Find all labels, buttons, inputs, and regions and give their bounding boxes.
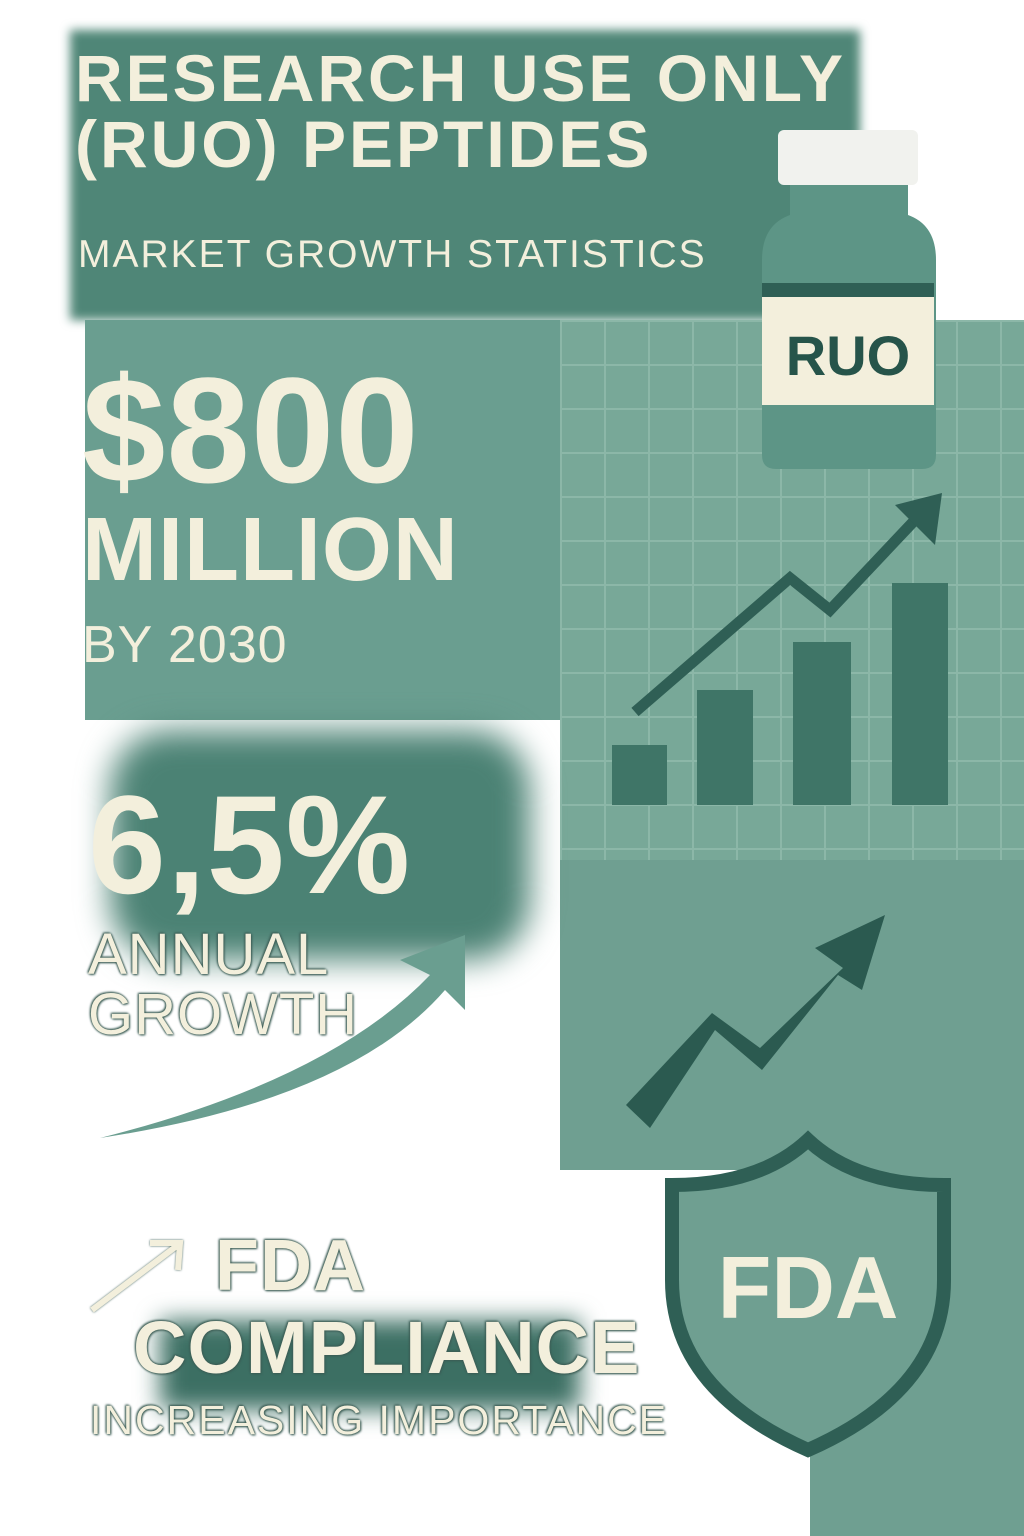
stat: 800 million: MILLION [82, 500, 459, 600]
header block [70, 30, 860, 320]
icon: zigzag arrow [626, 915, 885, 1128]
arrow: curved growth [100, 935, 465, 1138]
stat: FDA compliance: INCREASING IMPORTANCE [90, 1397, 668, 1443]
stat: 800 million: $800 [82, 346, 420, 514]
icon: FDA shield [672, 1140, 944, 1450]
growth blob [110, 730, 530, 960]
title: RESEARCH USE ONLY [75, 41, 846, 115]
stat: 800 million [82, 346, 459, 674]
stat: 800 million: BY 2030 [82, 616, 288, 674]
main stat panel [85, 320, 560, 720]
compliance blob [160, 1320, 580, 1410]
grid chart panel [560, 320, 1024, 860]
title: (RUO) PEPTIDES [75, 107, 652, 181]
icon: FDA shield: FDA [718, 1238, 898, 1337]
stat: growth: GROWTH [88, 982, 358, 1047]
title [75, 41, 846, 181]
icon: bottle RUO [762, 130, 936, 469]
bar chart [612, 493, 948, 805]
stat: FDA compliance: COMPLIANCE [133, 1306, 640, 1389]
stat: growth [86, 766, 411, 1047]
subtitle: MARKET GROWTH STATISTICS [78, 233, 707, 276]
stat: growth: 6,5% [88, 766, 411, 923]
lower right panel [560, 860, 1024, 1170]
icon: small arrow [92, 1243, 180, 1310]
icon: bottle RUO: RUO [786, 324, 910, 387]
stat: FDA compliance [90, 1226, 668, 1443]
right strip [810, 1170, 1024, 1536]
stat: FDA compliance: FDA [215, 1226, 366, 1306]
stat: growth: ANNUAL [88, 922, 329, 987]
